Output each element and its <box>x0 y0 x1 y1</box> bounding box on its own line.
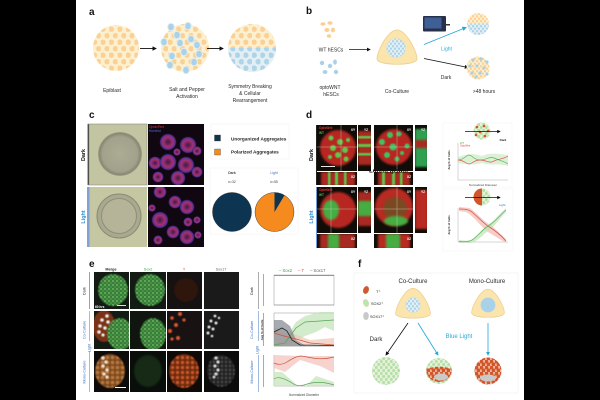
light YZ 1: YZ <box>364 190 368 194</box>
light XZ 1 <box>317 234 357 248</box>
co-culture T <box>167 311 202 349</box>
arrow <box>140 48 156 50</box>
legend SOX17: SOX17⁺ <box>370 315 384 319</box>
pie charts <box>210 168 298 234</box>
light XY 1 <box>317 187 357 233</box>
co-culture sox2 <box>130 311 166 349</box>
fluorescence light <box>148 187 204 247</box>
line chart row labels: Light <box>256 345 260 354</box>
light YZ 1 <box>358 187 371 233</box>
chart co-culture <box>263 312 334 346</box>
row labels: Light <box>88 343 92 352</box>
caption symmetry breaking: Rearrangement <box>233 98 268 104</box>
legend SOX17 <box>363 312 384 320</box>
mono-culture dome <box>472 289 504 317</box>
dark arrow <box>424 58 468 68</box>
dark XY 1: OptoWnt <box>319 126 333 130</box>
light chart <box>443 188 513 251</box>
dark XY 2 <box>374 125 413 171</box>
epiblast cell cluster <box>93 25 139 71</box>
pie charts: Dark <box>228 171 236 175</box>
row label dark: Dark <box>309 149 315 161</box>
dark XY 2: XY <box>407 128 412 132</box>
row bar light <box>316 187 317 248</box>
dark arrow <box>386 323 408 355</box>
dark XZ 1: XZ <box>351 175 355 179</box>
fluorescence dark <box>148 124 204 185</box>
axis label x: Normalized Diameter <box>289 393 320 397</box>
brightfield light <box>87 187 147 247</box>
pie charts: n=55 <box>270 180 278 184</box>
caption salt and pepper: Activation <box>176 94 198 100</box>
row label light: Light <box>309 210 315 224</box>
column headers <box>105 268 226 272</box>
Dark text: Dark <box>441 75 452 81</box>
light chart: Avg % of Cells <box>447 215 451 235</box>
label c: c <box>89 110 95 121</box>
dark XZ 2: XZ <box>407 175 411 179</box>
line chart row labels: Dark <box>250 287 254 295</box>
co-culture sox17 <box>204 311 239 349</box>
light device <box>423 16 450 32</box>
panel a: epiblast to symmetry breaking <box>89 7 276 104</box>
column headers: Merge <box>105 268 117 272</box>
heading mono-culture: Mono-Culture <box>469 279 506 285</box>
WT cells <box>320 21 335 38</box>
mono-culture light outcome <box>474 358 502 384</box>
legend T <box>362 285 380 295</box>
label b: b <box>306 6 312 17</box>
dark outcome cluster <box>372 357 400 385</box>
dark sox2 <box>130 272 166 309</box>
dark XY 1: WT <box>319 131 324 135</box>
light XY 1: XY <box>351 190 356 194</box>
row labels: Mono-Culture <box>82 360 86 384</box>
column headers: Sox17 <box>216 268 226 272</box>
chart mono-culture <box>263 355 334 387</box>
dark chart: Normalized Diameter <box>469 183 497 187</box>
co-culture light outcome <box>426 358 452 384</box>
dark chart: WT <box>460 141 464 145</box>
column headers: Sox2 <box>144 268 152 272</box>
mono-culture sox2 <box>130 351 166 392</box>
mono-culture sox17 <box>204 351 239 392</box>
light XZ 2: XZ <box>407 237 411 241</box>
legend T: T⁺ <box>376 290 380 294</box>
light arrow <box>424 28 466 44</box>
dark YZ 2 <box>415 125 427 171</box>
heading co-culture: Co-Culture <box>398 279 428 285</box>
hours label: >48 hours <box>473 89 496 95</box>
polarized aggregate <box>467 13 489 35</box>
dark sox17 <box>204 272 239 309</box>
dark T <box>167 272 202 309</box>
dark XY 1: XY <box>351 128 356 132</box>
blue arrow co-culture <box>418 323 438 355</box>
dark YZ 1 <box>358 125 371 171</box>
symmetry breaking cluster <box>228 24 276 72</box>
panel c: aggregate imaging and pies <box>81 110 298 247</box>
unorganized aggregate <box>466 56 490 80</box>
light XZ 2 <box>374 234 413 248</box>
row bar dark <box>316 125 317 185</box>
WT label: WT hESCs <box>319 48 344 54</box>
light XZ 1: XZ <box>351 237 355 241</box>
co-culture dome <box>377 30 417 64</box>
optoWNT cells <box>320 59 338 74</box>
co-culture label: Co-Culture <box>385 89 409 95</box>
legend <box>211 124 289 159</box>
label f: f <box>358 259 362 270</box>
dark XY 1 <box>317 125 357 171</box>
pie charts: n=32 <box>228 180 236 184</box>
schematic aggregate <box>465 122 500 140</box>
optoWNT label: hESCs <box>323 92 339 98</box>
Dark text: Dark <box>370 337 383 343</box>
caption epiblast: Epiblast <box>103 88 122 94</box>
fluorescence dark: Hoechst <box>149 129 161 133</box>
panel frame <box>354 273 518 393</box>
panel e: marker imaging <box>82 259 334 397</box>
panel f: culture comparison <box>354 259 518 393</box>
fluorescence dark: Opsin/Red <box>149 125 164 129</box>
optoWNT label: optoWNT <box>319 85 341 91</box>
light XY 1: OptoWnt <box>319 188 333 192</box>
arrow <box>207 48 223 50</box>
light XY 1: WT <box>319 193 324 197</box>
dark XZ 2 <box>374 172 413 185</box>
dark YZ 1: YZ <box>364 128 368 132</box>
dark chart: OptoWnt <box>460 144 471 148</box>
legend SOX2: SOX2⁺ <box>371 302 383 306</box>
line chart bars <box>257 272 260 392</box>
dark merge <box>94 272 129 309</box>
schematic aggregate <box>465 188 500 206</box>
dark chart: Avg % of Cells <box>447 150 451 170</box>
label a: a <box>89 7 95 18</box>
co-culture merge <box>94 311 129 349</box>
brightfield dark <box>88 124 147 185</box>
arrow to co-culture <box>349 48 370 50</box>
caption symmetry breaking: Symmetry Breaking <box>228 84 272 90</box>
axis label y: Avg % of Cells <box>260 319 264 340</box>
legend SOX2 <box>362 298 383 308</box>
column headers: T <box>183 268 186 272</box>
line chart row labels <box>250 287 260 384</box>
line chart row labels: Mono-Culture <box>250 360 254 384</box>
Light text: Light <box>441 46 453 52</box>
chart dark <box>263 274 334 306</box>
legend: Polarized Aggregates <box>231 150 279 154</box>
white page area <box>76 0 524 400</box>
co-culture dome <box>396 288 430 318</box>
light XY 2: XY <box>407 190 412 194</box>
label e: e <box>89 259 95 270</box>
mono-culture T <box>167 351 202 392</box>
dark chart: Dark <box>500 138 507 142</box>
pie light <box>255 192 294 232</box>
dark merge: 60 hrs <box>95 305 105 309</box>
line chart row labels: Co-Culture <box>250 321 254 339</box>
legend: – Sox2 – T – Sox17 <box>279 268 326 273</box>
pie dark <box>212 192 252 232</box>
dark XZ 1 <box>317 172 357 185</box>
light XY 2 <box>374 187 413 233</box>
row labels <box>82 287 92 384</box>
row label light: Light <box>81 210 87 224</box>
caption symmetry breaking: & Cellular <box>239 91 261 97</box>
row bars <box>88 272 91 392</box>
panel b: co-culture setup <box>306 6 496 98</box>
caption salt and pepper: Salt and Pepper <box>169 87 205 93</box>
light chart: Light <box>499 203 506 207</box>
light YZ 2 <box>415 187 427 233</box>
overlapping caption text: Lorem ipsum <box>369 168 408 174</box>
dark YZ 2: YZ <box>421 128 425 132</box>
label d: d <box>306 110 312 121</box>
pie charts: Light <box>270 171 278 175</box>
legend: Unorganized Aggregates <box>231 136 287 142</box>
panel d: confocal sections <box>306 110 513 251</box>
Blue Light text: Blue Light <box>446 334 473 340</box>
light YZ 2: YZ <box>421 190 425 194</box>
row labels: Co-Culture <box>82 321 86 339</box>
blue arrow mono-culture <box>487 323 489 355</box>
row label dark: Dark <box>81 149 87 161</box>
row labels: Dark <box>82 287 86 295</box>
salt and pepper cluster <box>160 22 209 74</box>
infographic <box>76 0 524 400</box>
mono-culture merge <box>94 351 129 392</box>
dark chart <box>443 122 512 187</box>
